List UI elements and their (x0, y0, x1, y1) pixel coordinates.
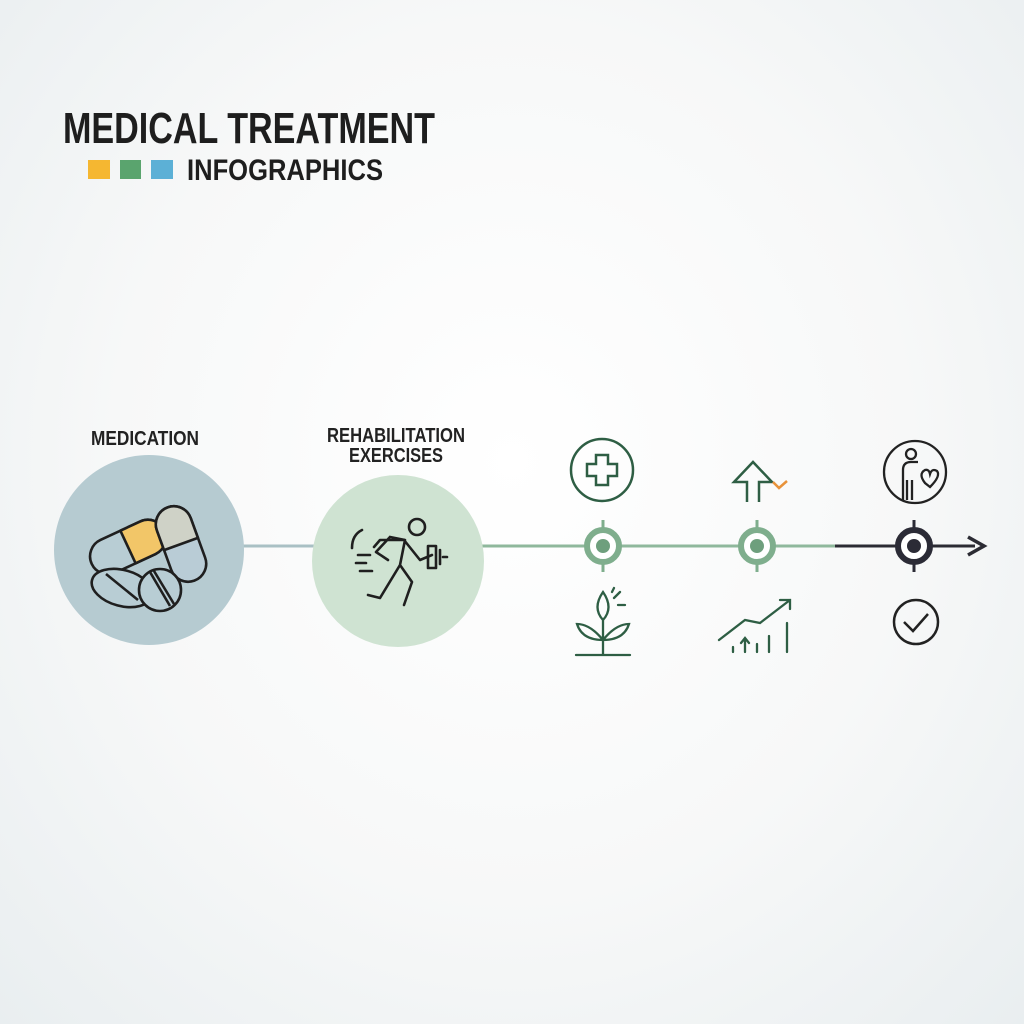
label: rehabilitation exercises (327, 425, 465, 467)
icon: up arrow with check (734, 462, 787, 502)
icon: growth chart (719, 600, 790, 652)
panel: medication circle (54, 455, 244, 645)
icon: running person with weight (352, 519, 447, 605)
subtitle: INFOGRAPHICS (187, 154, 383, 187)
node 1 (587, 520, 619, 572)
icon: person with heart (884, 441, 946, 503)
timeline line (240, 537, 984, 555)
title: MEDICAL TREATMENT (63, 104, 435, 153)
label: rehabilitation exercises: EXERCISES (349, 445, 443, 467)
icon: pills (84, 501, 211, 613)
label: medication: MEDICATION (91, 428, 199, 450)
icon: medical cross (571, 439, 633, 501)
label: rehabilitation exercises: REHABILITATION (327, 425, 465, 447)
icon: check circle (894, 600, 938, 644)
node 2 (741, 520, 773, 572)
icon: plant (576, 588, 630, 655)
panel: rehabilitation circle (312, 475, 484, 647)
node 3 (898, 520, 930, 572)
title (63, 104, 435, 187)
legend squares (88, 160, 173, 179)
